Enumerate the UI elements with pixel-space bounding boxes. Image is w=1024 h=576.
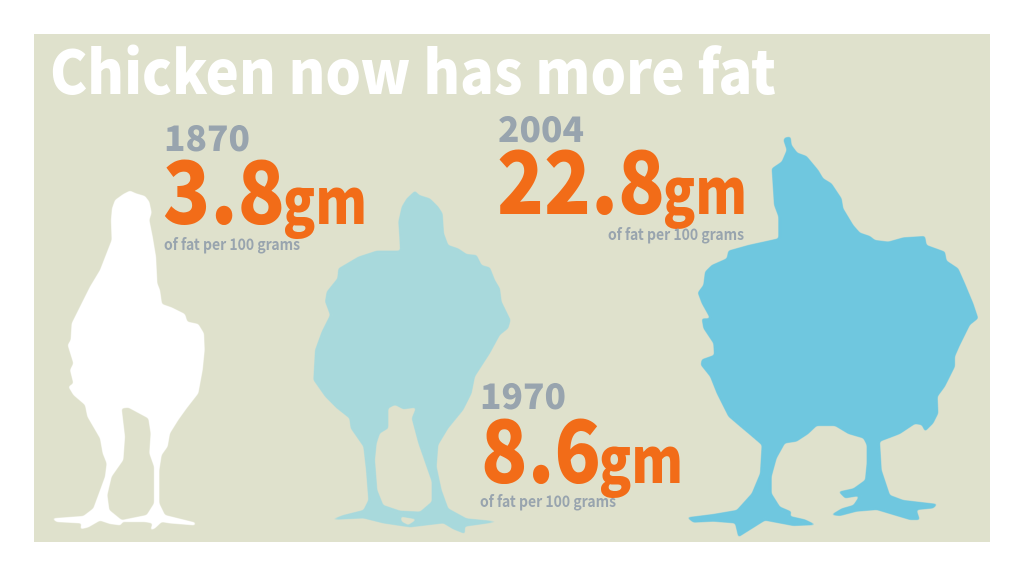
icon: blue chicken 2004 (687, 137, 978, 537)
stat: 1870 (163, 111, 367, 255)
stat: 1970 (480, 369, 683, 512)
caption: of fat per 100 grams (164, 231, 300, 255)
value 22.8: 22.8 (497, 114, 665, 240)
unit gm: gm (599, 411, 683, 502)
stat: 2004 (497, 102, 747, 245)
caption: of fat per 100 grams (480, 488, 616, 512)
title: Chicken now has more fat (50, 25, 776, 112)
icon: white chicken 1870 (52, 191, 205, 531)
caption: of fat per 100 grams (608, 221, 744, 245)
year 2004: 2004 (498, 102, 584, 153)
value 3.8: 3.8 (163, 124, 285, 250)
unit gm: gm (663, 142, 747, 233)
year 1970: 1970 (480, 369, 566, 420)
value 8.6: 8.6 (481, 383, 601, 509)
unit gm: gm (283, 152, 367, 243)
year 1870: 1870 (164, 111, 250, 162)
icon: pale blue chicken 1970 (313, 191, 511, 534)
